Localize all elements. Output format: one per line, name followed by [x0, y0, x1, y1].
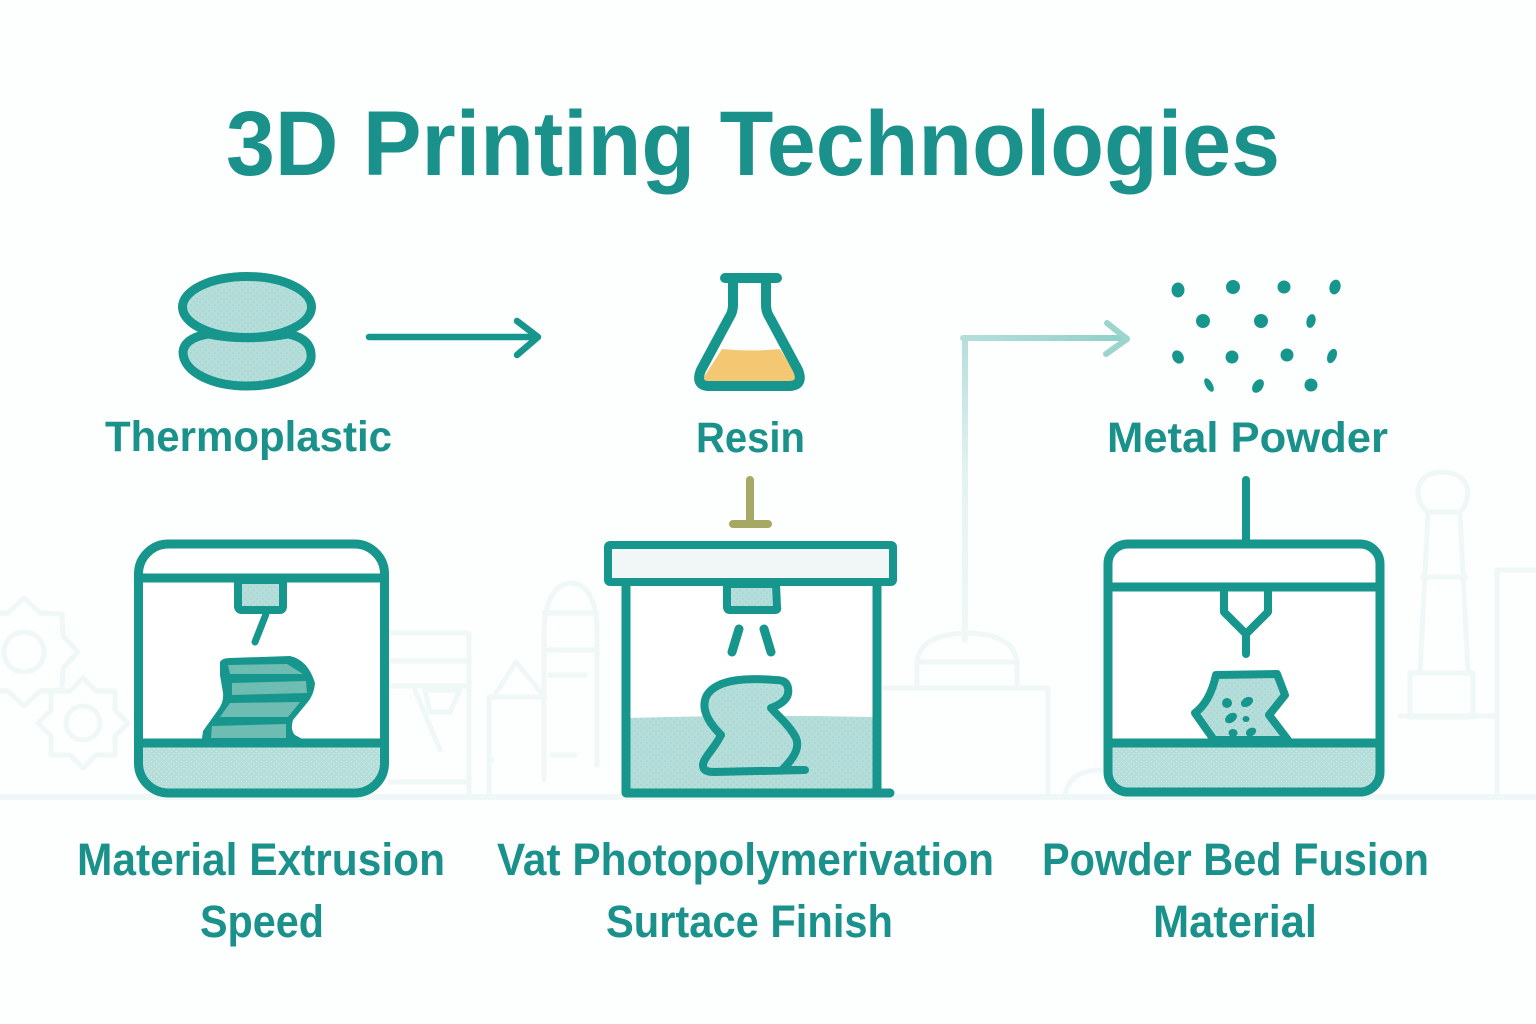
label: Vat Photopolymerivation / Surtace Finish: Surtace Finish	[606, 896, 893, 947]
printer: vat photopolymerisation	[608, 480, 893, 793]
icon: metal powder dots	[1170, 278, 1342, 395]
olive connector	[733, 480, 768, 524]
label: Material Extrusion / Speed: Speed	[200, 896, 324, 947]
icon: thermoplastic discs	[182, 276, 312, 386]
extruded part with layers	[201, 656, 315, 746]
background: faint industrial skyline	[0, 472, 1536, 797]
arrow: resin to metal powder	[963, 323, 1127, 640]
label: Powder Bed Fusion / Material: Powder Bed Fusion	[1042, 834, 1429, 885]
label: Resin: Resin	[696, 414, 805, 462]
printer: powder bed fusion	[1108, 480, 1380, 792]
icon: resin flask	[699, 278, 800, 387]
label: Powder Bed Fusion / Material	[1042, 834, 1429, 947]
arrow: thermoplastic to resin	[369, 321, 538, 355]
label: Vat Photopolymerivation / Surtace Finish	[497, 834, 994, 947]
label: Material Extrusion / Speed	[77, 834, 445, 947]
label: Thermoplastic: Thermoplastic	[105, 413, 392, 461]
label: Material Extrusion / Speed: Material Extrusion	[77, 834, 445, 885]
sintered part with powder specks	[1195, 674, 1288, 740]
title: 3D Printing Technologies	[226, 93, 1280, 195]
label: Vat Photopolymerivation / Surtace Finish: Vat Photopolymerivation	[497, 834, 994, 885]
label: Powder Bed Fusion / Material: Material	[1153, 896, 1317, 947]
printer: material extrusion	[138, 544, 384, 793]
label: Metal Powder: Metal Powder	[1107, 414, 1388, 462]
